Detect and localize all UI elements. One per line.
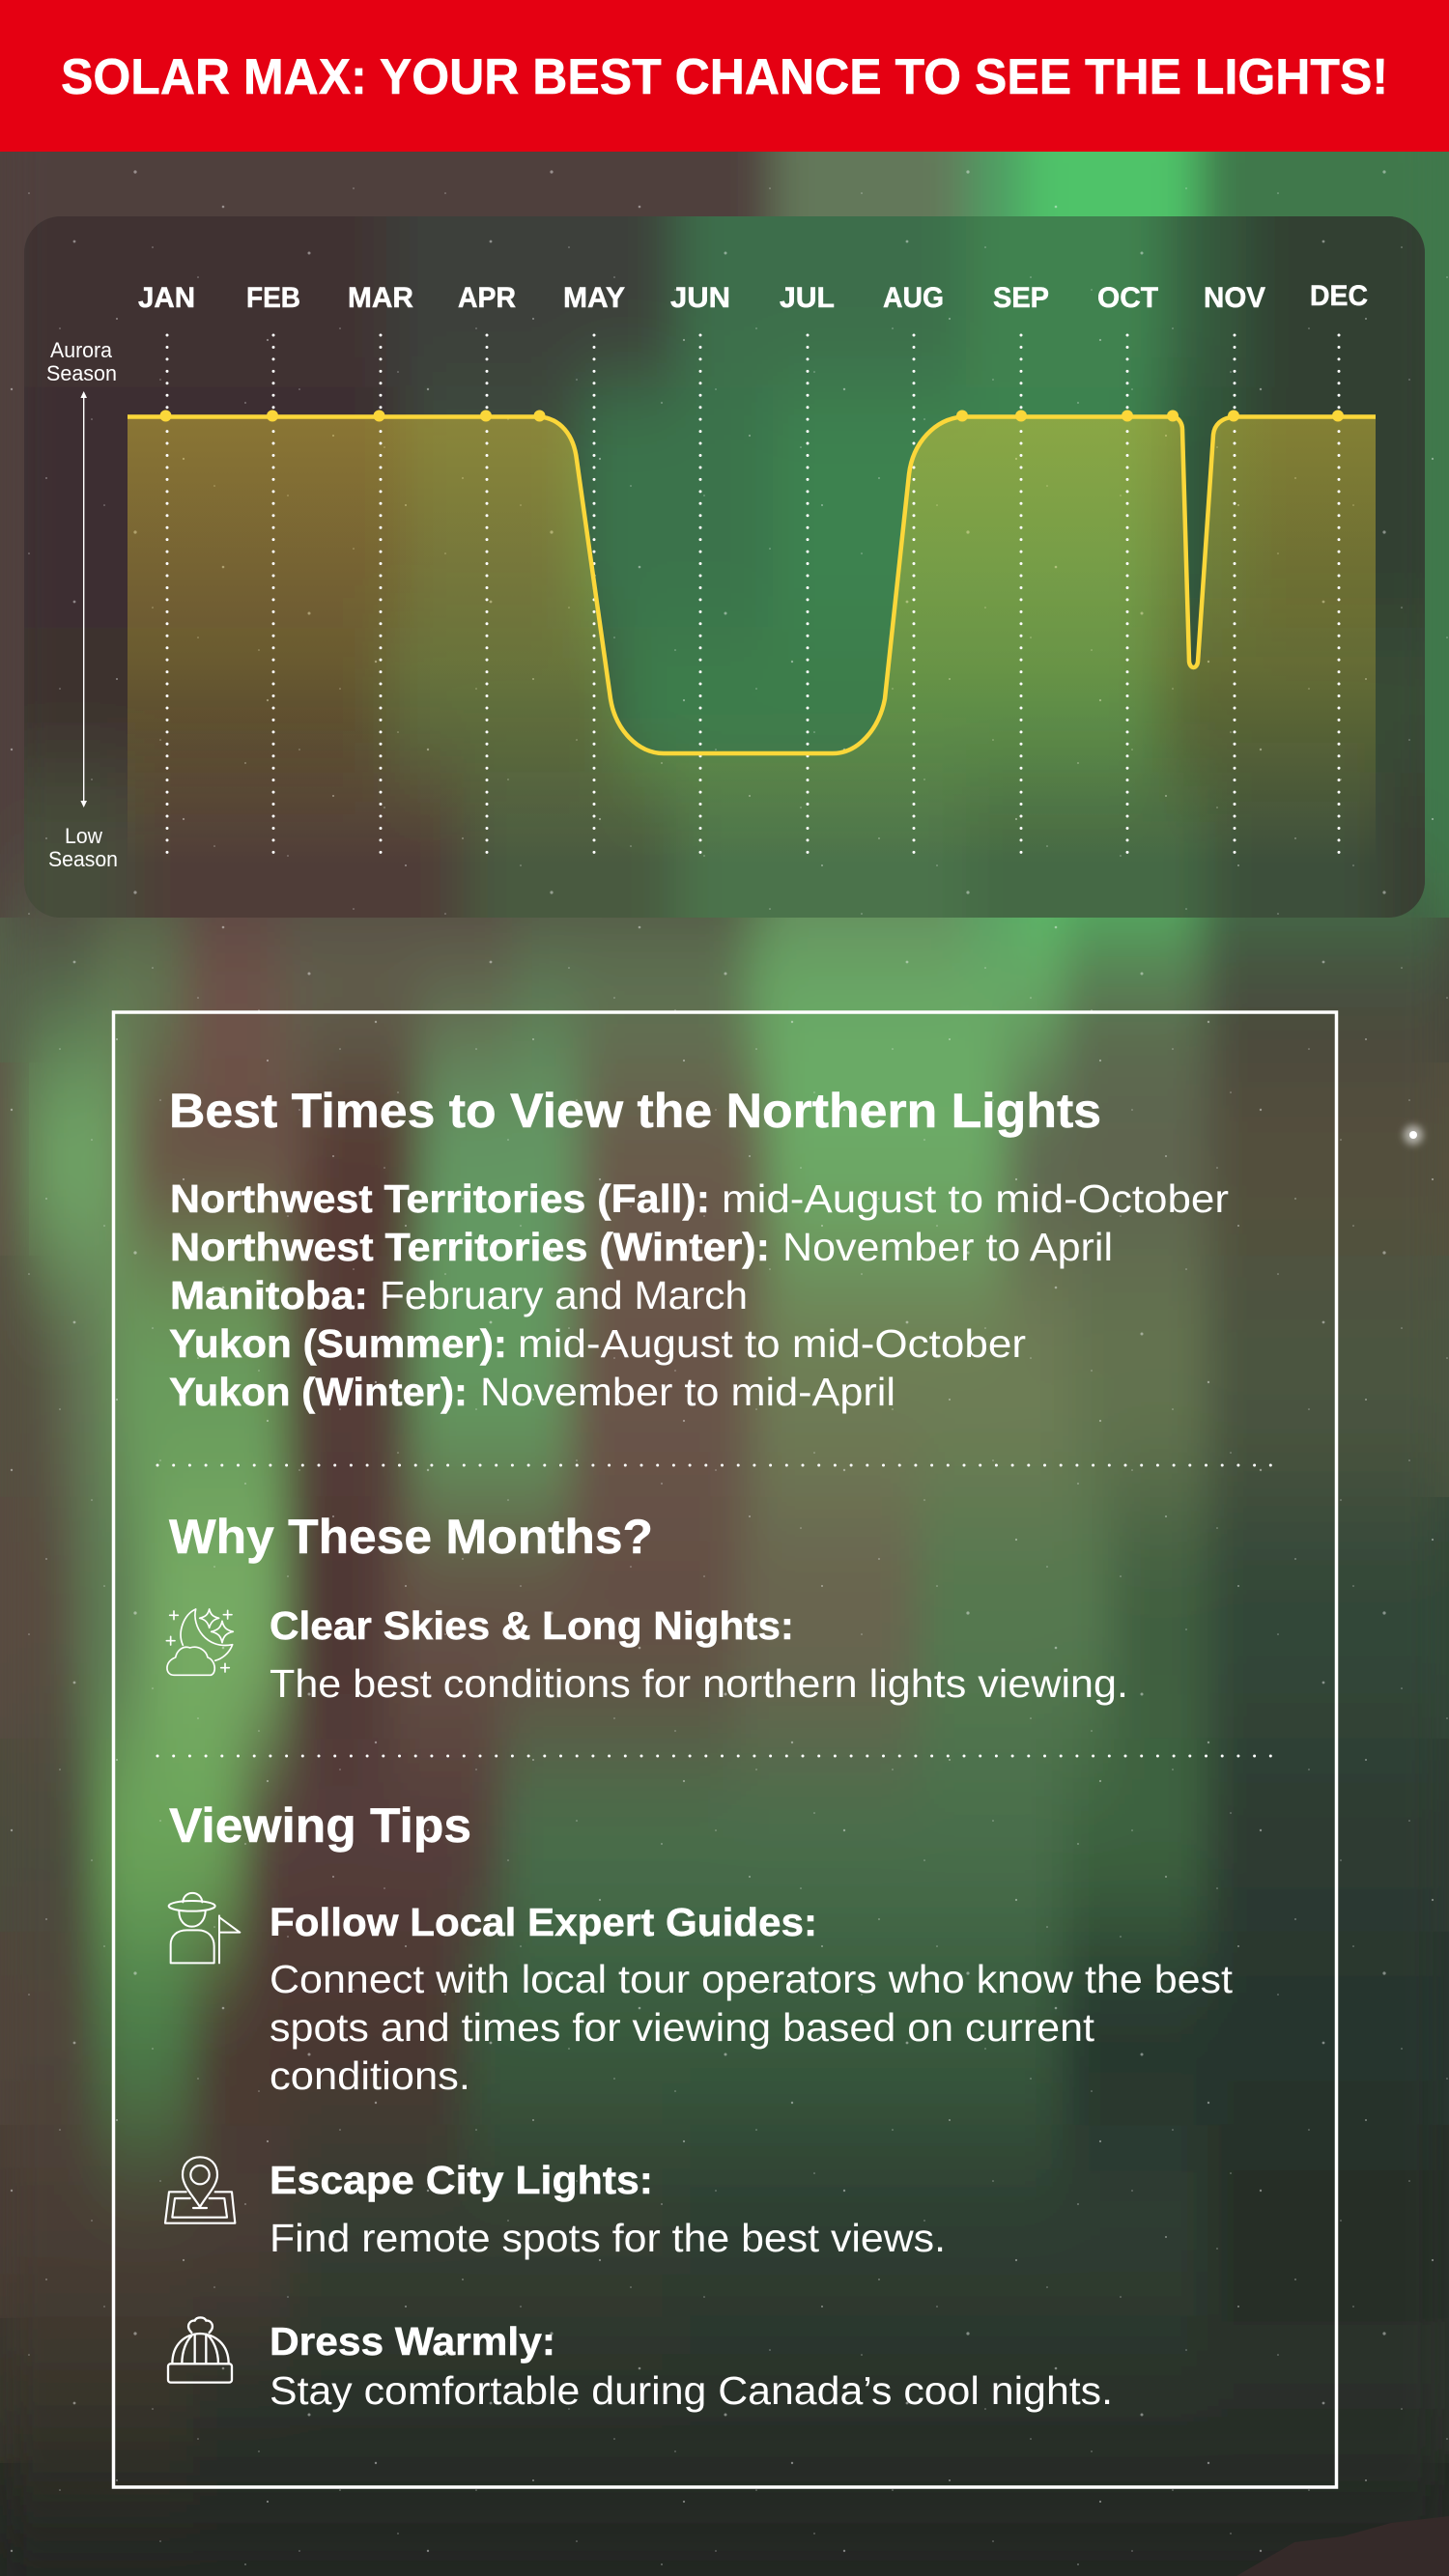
heading: why these months: Why These Months?	[169, 1510, 653, 1564]
icon: map pin	[165, 2157, 235, 2223]
text block: best times list: Northwest Territories (Fall):	[170, 1176, 710, 1221]
title: SOLAR MAX: YOUR BEST CHANCE TO SEE THE LIGHTS!	[61, 49, 1388, 105]
heading: viewing tips: Viewing Tips	[169, 1798, 471, 1853]
y axis label: aurora season	[46, 338, 117, 385]
y axis label: low season: Season	[48, 847, 118, 871]
month labels	[138, 280, 1368, 314]
month labels: JUN	[670, 282, 730, 314]
month labels: NOV	[1204, 282, 1265, 314]
icon: local guide with flag	[169, 1893, 240, 1963]
text block: clear skies: Clear Skies & Long Nights:	[270, 1603, 794, 1648]
header banner	[0, 0, 1449, 152]
bright star	[1404, 1125, 1423, 1145]
text block: local guides: conditions.	[270, 2053, 470, 2098]
text block: best times list: mid-August to mid-October	[518, 1321, 1026, 1366]
text block: local guides	[270, 1900, 1234, 2098]
text block: best times list: November to April	[782, 1225, 1113, 1269]
y axis label: aurora season: Aurora	[50, 338, 113, 362]
text block: dress warmly	[270, 2319, 1113, 2413]
season trend line	[128, 417, 1376, 753]
month labels: SEP	[993, 282, 1049, 314]
month labels: MAR	[348, 282, 413, 314]
text block: best times list	[169, 1176, 1229, 1414]
text block: local guides: spots and times for viewing based on current	[270, 2005, 1095, 2050]
y axis label: low season: Low	[65, 824, 102, 848]
text block: best times list: February and March	[380, 1273, 748, 1317]
y axis label: low season	[48, 824, 118, 871]
text block: local guides: Follow Local Expert Guides:	[270, 1900, 817, 1944]
icon: winter hat	[168, 2317, 232, 2383]
text block: city lights	[270, 2158, 946, 2260]
text block: best times list: Manitoba:	[170, 1273, 368, 1317]
y axis arrow	[80, 391, 87, 807]
text block: best times list: mid-August to mid-October	[722, 1176, 1229, 1221]
text block: best times list: Northwest Territories (Winter):	[170, 1225, 770, 1269]
y axis label: aurora season: Season	[46, 361, 117, 385]
text block: best times list: November to mid-April	[480, 1370, 895, 1414]
chart area fill	[128, 416, 1376, 864]
month labels: APR	[458, 282, 516, 314]
panel: viewing information box	[114, 1012, 1337, 2487]
month labels: FEB	[246, 282, 300, 314]
text block: local guides: Connect with local tour operators who know the best	[270, 1957, 1234, 2001]
dotted month gridlines	[167, 335, 1339, 857]
month labels: DEC	[1310, 280, 1368, 312]
month labels: MAY	[563, 282, 625, 314]
month labels: JUL	[780, 282, 835, 314]
heading: best times: Best Times to View the Northern Lights	[169, 1084, 1101, 1138]
month labels: JAN	[138, 282, 195, 314]
text block: dress warmly: Dress Warmly:	[270, 2319, 555, 2364]
month labels: AUG	[883, 282, 944, 314]
text block: dress warmly: Stay comfortable during Canada’s cool nights.	[270, 2368, 1113, 2413]
text block: clear skies	[270, 1603, 1128, 1706]
text block: clear skies: The best conditions for northern lights viewing.	[270, 1661, 1128, 1706]
panel: aurora season chart	[24, 216, 1425, 918]
text block: city lights: Escape City Lights:	[270, 2158, 653, 2202]
text block: best times list: Yukon (Winter):	[169, 1370, 468, 1414]
icon: moon, stars and cloud	[166, 1609, 233, 1675]
text block: city lights: Find remote spots for the best views.	[270, 2216, 946, 2260]
text block: best times list: Yukon (Summer):	[169, 1321, 507, 1366]
data point markers	[160, 410, 1344, 421]
month labels: OCT	[1097, 282, 1158, 314]
